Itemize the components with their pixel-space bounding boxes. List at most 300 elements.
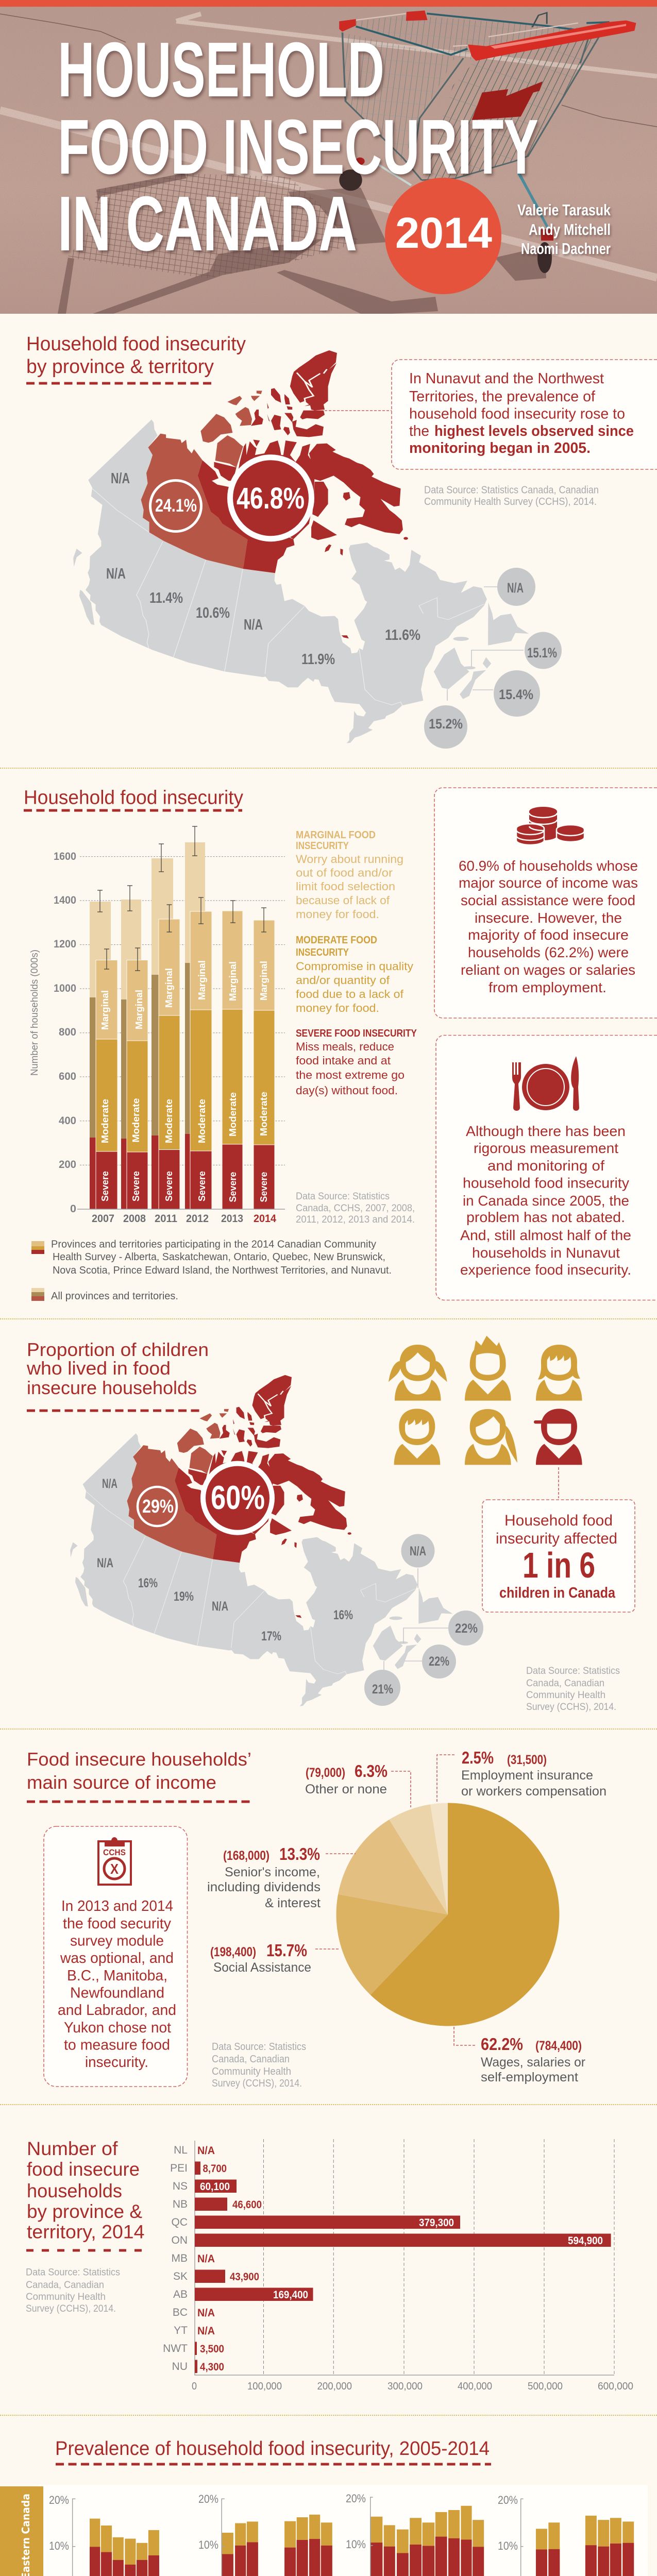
province labels: YT [174,2325,188,2336]
callout: social assistance [434,788,657,1018]
chart: NS [346,2492,486,2576]
heading: Household food insecurity [26,333,246,355]
icon: girl with pigtails [389,1345,447,1401]
panel: number of households by province [26,2138,633,2392]
callout box: In Nunavut and the Northwest [409,370,604,387]
callout: social assistance: insecure. However, the [475,910,622,926]
data source: Community Health Survey (CCHS), 2014. [424,496,597,507]
heading underline [24,809,242,812]
data source: Data Source: Statistics [26,2267,120,2278]
bars [195,2162,611,2373]
authors: Naomi Dachner [521,240,611,258]
data source: Data Source: Statistics [212,2041,306,2053]
callout: survey module: and Labrador, and [58,2002,176,2019]
callout: monitoring: household food insecurity [463,1175,629,1191]
callout box: Territories, the prevalence of [409,388,596,405]
map value labels [106,470,420,668]
callout: survey module [44,1826,188,2087]
label: social assistance: Social Assistance [213,1960,311,1975]
label: seniors income: Senior's income, [225,1865,320,1879]
x axis labels: 500,000 [528,2381,563,2392]
data source [212,2041,306,2089]
y axis labels: 1400 [54,894,76,906]
heading: households [27,2180,122,2201]
Atlantic province bubbles: N/A [507,580,524,596]
bar chart [29,826,285,1225]
Nunavut callout circle: 46.8% [237,482,305,515]
values: N/A [197,2325,215,2337]
top accent bar [0,0,657,7]
Atlantic province bubbles: N/A [410,1544,426,1558]
icon: boy with spiky hair [465,1336,511,1401]
chart: PE: 10% [198,2538,218,2551]
Nunavut callout circle [230,457,311,539]
bar segment labels: Marginal [100,990,110,1030]
NWT callout circle [150,480,201,532]
year badge: 2014 [395,209,492,257]
moderate definition [296,935,413,1014]
callout: monitoring: Although there has been [466,1123,626,1139]
values: 43,900 [230,2271,259,2283]
callout box: household food insecurity rose to [409,406,625,422]
Atlantic province bubbles [364,1534,483,1706]
map value labels: N/A [106,566,126,582]
icon: clipboard [98,1837,131,1885]
label: employment insurance: (31,500) [507,1753,547,1767]
callout: 1 in 6: Household food [504,1512,613,1529]
heading [26,333,246,378]
chart: NB: 20% [498,2494,518,2506]
Atlantic province bubbles: 15.4% [499,687,533,702]
values [197,2145,603,2373]
Nunavut callout circle: 60% [211,1479,265,1516]
y axis labels: 0 [70,1203,76,1215]
pie chart [336,1803,559,2026]
chart: NS: 10% [346,2538,366,2551]
callout: social assistance: households (62.2%) were [468,944,629,960]
photo of empty shopping cart [0,7,657,314]
values: 46,600 [232,2199,262,2211]
bar segment labels: Severe [259,1172,269,1202]
values: 3,500 [200,2343,224,2355]
chart: NL: 20% [49,2494,69,2506]
severe definition [296,1028,417,1097]
horizontal bar chart [163,2139,633,2392]
moderate definition: Compromise in quality [296,960,413,973]
y axis labels: 1000 [54,982,76,994]
y axis title: Number of households (000s) [29,950,40,1076]
chart: PE [196,2493,338,2576]
pie connectors [315,1755,476,2045]
y axis labels: 800 [59,1026,76,1038]
map of Canada [73,350,529,743]
callout: 1 in 6 [482,1500,635,1612]
authors: Andy Mitchell [529,221,611,239]
Atlantic province bubbles: 15.2% [429,716,463,732]
legend: participating provinces: Health Survey - Alberta, Saskatchewan, Ontario, Quebec, New Brunswick, [53,1251,385,1263]
x axis labels: 300,000 [388,2381,423,2392]
values: 60,100 [200,2181,230,2193]
map of Canada [70,1375,453,1706]
label: wages: (784,400) [535,2039,582,2053]
legend: all provinces: All provinces and territories. [51,1291,178,1302]
map value labels: 16% [333,1608,353,1622]
label: employment insurance: or workers compensation [461,1784,607,1799]
x axis labels: 400,000 [458,2381,492,2392]
callout: survey module: the food security [63,1916,171,1932]
heading [27,2138,144,2242]
main title: HOUSEHOLD [58,26,384,113]
heading: Household food insecurity [24,787,243,809]
label: employment insurance: Employment insurance [461,1768,593,1783]
heading underline [56,2463,491,2466]
callout: monitoring: and monitoring of [487,1158,604,1174]
province labels: AB [173,2289,188,2300]
data source [296,1191,415,1225]
callout: social assistance: 60.9% of households whose [459,858,638,874]
province labels [163,2144,188,2372]
icon: clipboard: CCHS [103,1848,126,1857]
map value labels: 17% [261,1629,281,1643]
heading: food insecure [27,2159,140,2180]
callout: 1 in 6: insecurity affected [496,1530,617,1547]
heading: Number of [27,2138,118,2159]
all provinces bars [90,842,205,999]
callout box [392,360,657,469]
bar segment labels: Severe [100,1171,110,1201]
Atlantic province bubbles: 22% [455,1621,478,1636]
label: seniors income [207,1844,321,1910]
heading: by province & [27,2201,142,2222]
authors: Valerie Tarasuk [517,201,611,219]
province labels: NS [173,2180,188,2192]
icon: girl with ponytail [465,1409,517,1465]
province labels: NL [174,2144,188,2156]
values: 4,300 [200,2361,224,2373]
data source: Canada, CCHS, 2007, 2008, [296,1203,415,1214]
icon: plate and cutlery [512,1056,579,1111]
callout: 1 in 6: 1 in 6 [523,1545,595,1585]
chart: PE: 20% [198,2493,218,2505]
bar segment labels: Severe [164,1171,174,1201]
label: wages [481,2035,585,2084]
label: social assistance: (198,400) [210,1945,256,1959]
y axis labels: 1600 [54,851,76,862]
moderate definition: MODERATE FOOD [296,935,377,946]
label: employment insurance [461,1748,607,1799]
heading: territory, 2014 [27,2222,144,2242]
marginal definition: MARGINAL FOOD [296,829,376,841]
severe definition: Miss meals, reduce [296,1040,394,1053]
data source: Data Source: Statistics [526,1666,620,1676]
legend: participating provinces: Provinces and territories participating in the 2014 Canadian Community [51,1239,376,1250]
heading underline [27,1800,251,1803]
heading: Prevalence of household food insecurity, 2005-2014 [55,2438,490,2460]
map value labels: N/A [102,1477,117,1491]
y axis labels: 600 [59,1071,76,1082]
data source: Survey (CCHS), 2014. [212,2078,302,2089]
participating provinces bars [96,911,275,1209]
data source: Data Source: Statistics [296,1191,390,1202]
map value labels: 11.6% [385,627,420,643]
marginal definition: out of food and/or [296,867,393,879]
marginal definition: Worry about running [296,853,403,866]
bar segment labels: Moderate [131,1098,141,1143]
marginal definition: because of lack of [296,894,390,907]
map value labels: N/A [97,1556,113,1570]
label: seniors income: 13.3% [279,1844,320,1863]
Atlantic province bubbles: 15.1% [527,645,557,660]
x axis labels: 200,000 [317,2381,352,2392]
x axis years: 2013 [221,1213,243,1225]
heading: who lived in food [26,1358,171,1379]
icon: girl with bob [536,1345,582,1401]
main title: IN CANADA [58,180,357,267]
bar segment labels: Moderate [228,1092,238,1137]
severe definition: SEVERE FOOD INSECURITY [296,1028,417,1039]
data source: Survey (CCHS), 2014. [26,2303,116,2314]
y axis labels [54,851,76,1215]
heading underline [26,2249,145,2251]
legend: participating provinces [31,1239,392,1276]
label: social assistance [210,1941,311,1975]
callout: survey module: Newfoundland [70,1985,164,2001]
label: other or none: Other or none [305,1782,387,1797]
province labels: PEI [170,2162,188,2174]
moderate definition: and/or quantity of [296,974,390,987]
province labels: NU [172,2361,188,2372]
Atlantic province bubbles: 22% [429,1654,449,1669]
callout connector [325,410,392,411]
x axis years: 2014 [254,1213,276,1225]
data source: 2011, 2012, 2013 and 2014. [296,1214,415,1225]
heading [26,1339,209,1398]
Atlantic province bubbles [424,568,562,749]
province labels: SK [173,2270,188,2282]
panel: children map [26,1336,635,1713]
x axis labels [192,2381,633,2392]
heading [27,1749,251,1793]
icons: six children [389,1336,582,1465]
values: 594,900 [568,2235,603,2247]
bar segment labels: Moderate [259,1092,269,1136]
map value labels: 11.9% [301,651,335,668]
label: wages: Wages, salaries or [481,2055,585,2070]
panel: prevalence map [26,333,657,749]
y axis labels: 1200 [54,938,76,950]
year badge [385,178,501,294]
label: wages: self-employment [481,2070,578,2084]
data source: Canada, Canadian [212,2054,290,2065]
Atlantic province bubbles: 21% [372,1682,393,1697]
y axis labels: 400 [59,1115,76,1127]
callout: survey module: to measure food [64,2037,170,2054]
values: 379,300 [419,2217,454,2229]
bar segment labels: Moderate [164,1099,174,1143]
map value labels: 11.4% [149,590,183,606]
map value labels [97,1477,353,1643]
data source: Community Health [212,2066,291,2077]
severe definition: day(s) without food. [296,1084,398,1097]
province labels: BC [173,2307,188,2318]
label: seniors income: (168,000) [223,1849,269,1863]
bar segment labels: Marginal [228,961,238,1001]
icon: child with cap [534,1409,582,1465]
callout: survey module: B.C., Manitoba, [67,1968,167,1984]
icon: clipboard: X [110,1861,119,1877]
callout: survey module: was optional, and [60,1950,174,1967]
severe definition: the most extreme go [296,1069,405,1081]
heading underline [26,382,211,384]
callout: monitoring: experience food insecurity. [460,1262,631,1278]
heading: insecure households [27,1377,197,1398]
chart: NB [496,2494,637,2576]
bar segment labels: Marginal [197,960,207,1000]
callout: monitoring: households in Nunavut [472,1245,620,1261]
callout: survey module: In 2013 and 2014 [61,1898,173,1914]
label: employment insurance: 2.5% [462,1748,494,1767]
data source: Survey (CCHS), 2014. [526,1702,616,1713]
chart: NL [48,2494,189,2576]
bar segment labels: Severe [131,1171,141,1201]
callout: social assistance: from employment. [488,979,607,995]
connector to 1 in 6 callout [558,1467,559,1498]
label: seniors income: & interest [265,1896,321,1910]
province labels: QC [171,2216,188,2228]
NWT callout circle: 29% [142,1496,174,1517]
heading: Food insecure households’ [27,1749,251,1770]
authors [517,201,611,258]
map value labels: 10.6% [196,605,230,621]
callout: social assistance: social assistance were food [461,892,635,908]
moderate definition: food due to a lack of [296,988,404,1001]
data source [526,1666,620,1713]
x axis labels: 0 [192,2381,197,2392]
callout: 1 in 6: children in Canada [499,1585,616,1601]
heading: Proportion of children [27,1339,209,1360]
panel: prevalence 2005-2014 [0,2438,648,2576]
chart: NL: 10% [49,2539,69,2552]
x axis years: 2012 [186,1213,209,1225]
map value labels: N/A [244,617,263,633]
x axis years: 2011 [155,1213,177,1225]
y axis labels: 200 [59,1159,76,1171]
severity definitions legend [296,829,417,1097]
data source [26,2267,120,2314]
callout: survey module: survey module [70,1933,164,1950]
province labels: NWT [163,2343,188,2354]
label: wages: 62.2% [481,2035,523,2054]
province labels: NB [173,2198,188,2210]
province labels: ON [171,2234,188,2246]
label: social assistance: 15.7% [266,1941,307,1960]
moderate definition: INSECURITY [296,947,349,958]
NWT callout circle [138,1487,177,1526]
map value labels: 16% [138,1576,158,1590]
callout: survey module: Yukon chose not [64,2020,171,2036]
bar segment labels: Marginal [164,968,174,1008]
values: N/A [197,2145,215,2157]
severe definition: food intake and at [296,1054,391,1067]
values: 169,400 [273,2289,308,2301]
panel: household food insecurity stacked bars [24,787,657,1302]
icon: coins [516,807,584,845]
callout: monitoring: problem has not abated. [466,1209,625,1225]
marginal definition [296,829,403,921]
icon: child with fringe [394,1409,440,1465]
data source: Data Source: Statistics Canada, Canadian [424,484,599,496]
callout box: monitoring began in 2005. [409,440,591,456]
chart: NS: 20% [346,2492,366,2505]
callout: social assistance: majority of food insecure [468,927,629,943]
NWT callout circle: 24.1% [155,496,197,516]
hero banner [0,0,657,314]
callout box: highest levels observed since [434,423,634,439]
label: other or none: (79,000) [306,1766,345,1780]
bar segment labels: Marginal [134,990,144,1029]
bar segment labels: Moderate [197,1099,207,1143]
panel: main source of income [27,1748,607,2089]
Nunavut callout circle [203,1464,272,1533]
data source: Community Health [26,2292,106,2302]
x axis years: 2007 [92,1213,114,1225]
x axis years: 2008 [123,1213,146,1225]
marginal definition: INSECURITY [296,840,349,852]
main title [58,26,538,267]
bar segment labels: Marginal [259,961,269,1001]
map value labels: 19% [174,1589,194,1604]
values: N/A [197,2253,215,2265]
callout: monitoring: rigorous measurement [474,1140,618,1156]
data source [424,484,599,507]
values: N/A [197,2307,215,2319]
marginal definition: money for food. [296,908,379,921]
callout box: the [409,423,429,439]
data source: Community Health [526,1690,605,1701]
callout: monitoring [436,1036,657,1300]
label: seniors income: including dividends [207,1880,321,1894]
cart front wheel and leg [519,174,549,230]
values: 8,700 [203,2163,227,2175]
panel: Eastern Canada [0,2485,648,2576]
callout: monitoring: in Canada since 2005, the [463,1193,629,1209]
map value labels: N/A [111,470,130,487]
label: other or none [305,1761,388,1797]
heading: main source of income [27,1772,216,1793]
bar segment labels [100,960,269,1202]
shopping cart [339,10,636,213]
bar segment labels: Moderate [100,1099,110,1143]
x axis years [92,1213,276,1225]
callout: survey module: insecurity. [85,2054,148,2071]
chart: NB: 10% [498,2539,518,2552]
province labels: MB [171,2252,188,2264]
x axis labels: 100,000 [247,2381,282,2392]
x axis labels: 600,000 [598,2381,633,2392]
data source: Canada, Canadian [526,1678,604,1689]
map value labels: N/A [212,1599,228,1614]
bar segment labels: Severe [197,1171,207,1201]
marginal definition: limit food selection [296,880,395,893]
heading underline [27,1410,201,1412]
label: other or none: 6.3% [355,1761,388,1781]
data source: Canada, Canadian [26,2280,104,2291]
moderate definition: money for food. [296,1002,379,1014]
callout: social assistance: reliant on wages or salaries [461,962,635,978]
callout: social assistance: major source of income was [459,875,638,891]
heading: by province & territory [26,356,214,378]
legend: participating provinces: Nova Scotia, Prince Edward Island, the Northwest Territories, and Nunavut. [53,1265,392,1276]
